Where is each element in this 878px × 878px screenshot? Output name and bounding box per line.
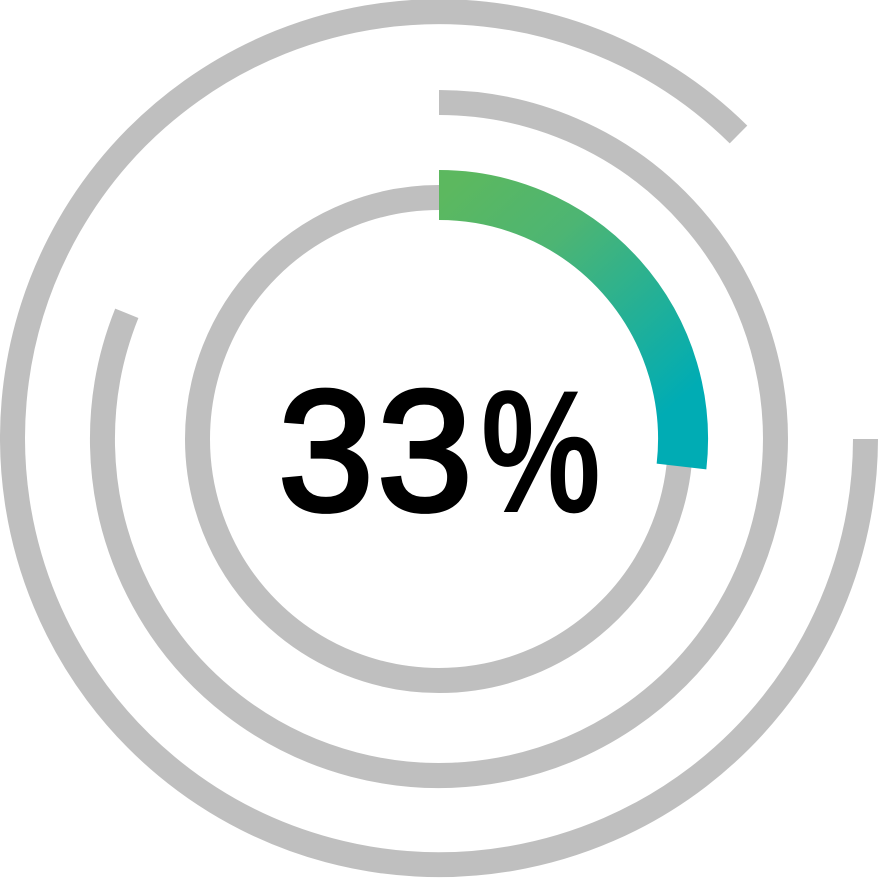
middle ring: [102, 102, 775, 775]
percentage value: %: [481, 355, 601, 550]
percentage value: [278, 355, 601, 550]
percentage value: 3: [377, 355, 473, 547]
inner ring: [198, 198, 680, 680]
percentage value: 3: [278, 355, 374, 547]
progress arc: 33 percent: [439, 195, 683, 466]
